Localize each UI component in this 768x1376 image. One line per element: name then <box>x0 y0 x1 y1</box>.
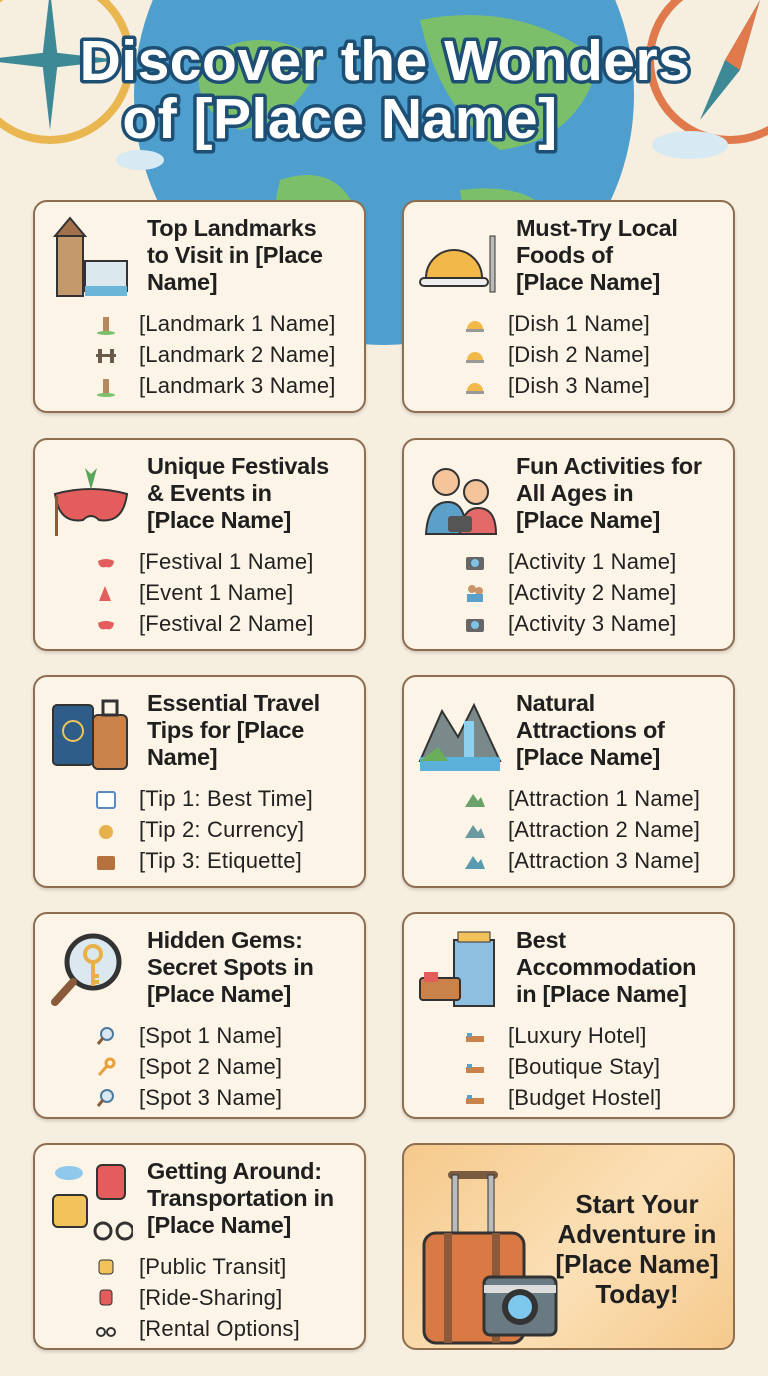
icon: mountains waterfall <box>418 702 502 771</box>
background globe <box>0 0 768 345</box>
title <box>80 29 691 154</box>
panel: landmarks: [Landmark 1 Name] <box>139 311 336 336</box>
panel: foods: Foods of <box>516 242 613 268</box>
icon: festival mask <box>54 468 128 536</box>
panel: travel tips: [Tip 3: Etiquette] <box>139 848 302 873</box>
panel: transportation: [Rental Options] <box>139 1316 300 1341</box>
icon: suitcase and camera <box>422 1171 558 1344</box>
panel: accommodation: [Budget Hostel] <box>508 1085 661 1110</box>
panel: foods <box>402 200 735 413</box>
panel: natural attractions: Attractions of <box>516 717 665 743</box>
panel: foods: Must-Try Local <box>516 215 678 241</box>
panel: hidden gems: [Spot 3 Name] <box>139 1085 282 1110</box>
panel: travel tips: [Tip 2: Currency] <box>139 817 304 842</box>
panel: festivals <box>33 438 366 651</box>
icon: food cloche <box>419 236 496 292</box>
panel: activities: [Activity 1 Name] <box>508 549 676 574</box>
panel: festivals: [Place Name] <box>147 507 291 533</box>
icon: hotel <box>419 932 495 1007</box>
panel: activities: [Activity 3 Name] <box>508 611 676 636</box>
panel: foods: [Dish 1 Name] <box>508 311 650 336</box>
panel: hidden gems: [Spot 1 Name] <box>139 1023 282 1048</box>
cta text: Start Your Adventure in [Place Name] Today! <box>555 1189 719 1309</box>
panel: natural attractions: [Attraction 2 Name] <box>508 817 700 842</box>
panel: travel tips: Name] <box>147 744 217 770</box>
panel: natural attractions: [Attraction 3 Name] <box>508 848 700 873</box>
panel: activities <box>402 438 735 651</box>
panel: transportation <box>33 1143 366 1350</box>
panel: activities: Fun Activities for <box>516 453 702 479</box>
panel: landmarks: Top Landmarks <box>147 215 316 241</box>
panel: travel tips: Tips for [Place <box>147 717 304 743</box>
panel: accommodation <box>402 912 735 1119</box>
panel: hidden gems: Secret Spots in <box>147 954 314 980</box>
panel: natural attractions: Natural <box>516 690 595 716</box>
panel: hidden gems: [Place Name] <box>147 981 291 1007</box>
icon: family <box>424 468 497 535</box>
icon: landmarks <box>53 216 128 297</box>
panel: hidden gems <box>33 912 366 1119</box>
panel: hidden gems: [Spot 2 Name] <box>139 1054 282 1079</box>
panel: festivals: [Event 1 Name] <box>139 580 293 605</box>
panel: transportation: [Ride-Sharing] <box>139 1285 282 1310</box>
panel: festivals: [Festival 2 Name] <box>139 611 314 636</box>
panel: landmarks: Name] <box>147 269 217 295</box>
panel: festivals: Unique Festivals <box>147 453 329 479</box>
panel: hidden gems: Hidden Gems: <box>147 927 303 953</box>
panel: activities: [Place Name] <box>516 507 660 533</box>
panel: call to action <box>402 1143 735 1350</box>
panel: landmarks: [Landmark 3 Name] <box>139 373 336 398</box>
panel: natural attractions: [Place Name] <box>516 744 660 770</box>
panel: natural attractions <box>402 675 735 888</box>
panel: foods: [Dish 2 Name] <box>508 342 650 367</box>
icon: magnifier and key <box>51 934 122 1006</box>
panel: travel tips: [Tip 1: Best Time] <box>139 786 313 811</box>
title: Discover the Wonders <box>80 29 690 93</box>
panel: activities: [Activity 2 Name] <box>508 580 676 605</box>
panel: transportation: [Public Transit] <box>139 1254 286 1279</box>
title: of [Place Name] <box>122 87 558 151</box>
panel: accommodation: [Luxury Hotel] <box>508 1023 647 1048</box>
panel: transportation: Getting Around: <box>147 1158 322 1184</box>
panel: foods: [Place Name] <box>516 269 660 295</box>
panel: landmarks: [Landmark 2 Name] <box>139 342 336 367</box>
panel: activities: All Ages in <box>516 480 633 506</box>
panel: accommodation: Best <box>516 927 566 953</box>
panel: transportation: [Place Name] <box>147 1212 291 1238</box>
panel: travel tips: Essential Travel <box>147 690 320 716</box>
panel: landmarks: to Visit in [Place <box>147 242 323 268</box>
panel: festivals: [Festival 1 Name] <box>139 549 314 574</box>
panel: accommodation: [Boutique Stay] <box>508 1054 660 1079</box>
panel: accommodation: in [Place Name] <box>516 981 687 1007</box>
panel: foods: [Dish 3 Name] <box>508 373 650 398</box>
panel: transportation: Transportation in <box>147 1185 334 1211</box>
panel: accommodation: Accommodation <box>516 954 696 980</box>
panel: festivals: & Events in <box>147 480 272 506</box>
panel: natural attractions: [Attraction 1 Name] <box>508 786 700 811</box>
panel: landmarks <box>33 200 366 413</box>
icon: passport and luggage <box>52 700 128 770</box>
icon: transport <box>52 1164 133 1240</box>
panel: travel tips <box>33 675 366 888</box>
